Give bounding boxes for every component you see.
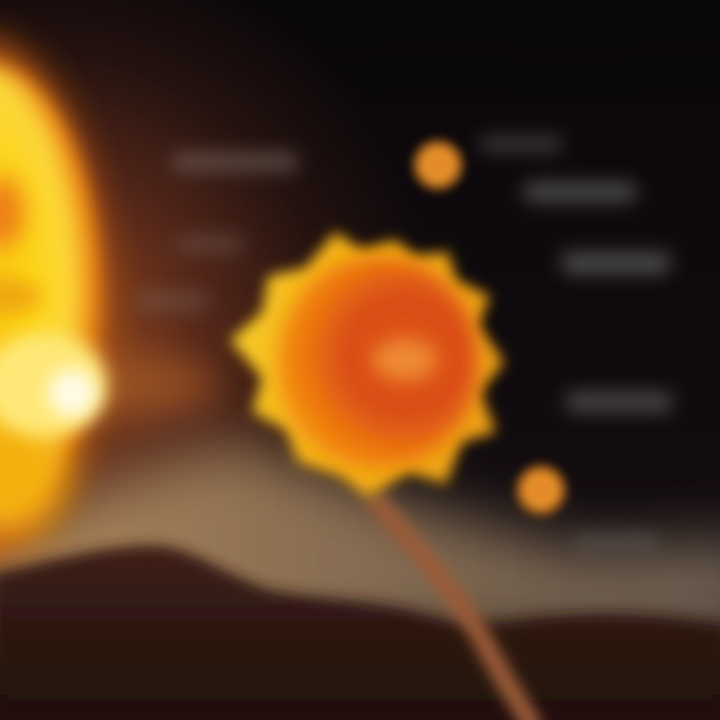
ground silhouette: [0, 545, 720, 720]
bright flare: [0, 333, 220, 437]
label smudges left: [136, 152, 298, 310]
core highlight: [373, 340, 437, 380]
large sun at left: [0, 38, 220, 562]
stem: [372, 498, 535, 720]
core: [278, 256, 478, 468]
label smudges right: [480, 136, 672, 550]
central sun: [230, 232, 504, 498]
horizon glow: [0, 440, 720, 640]
small orb bottom: [511, 460, 571, 520]
small orb top: [408, 135, 468, 195]
spiky corona: [230, 232, 504, 498]
